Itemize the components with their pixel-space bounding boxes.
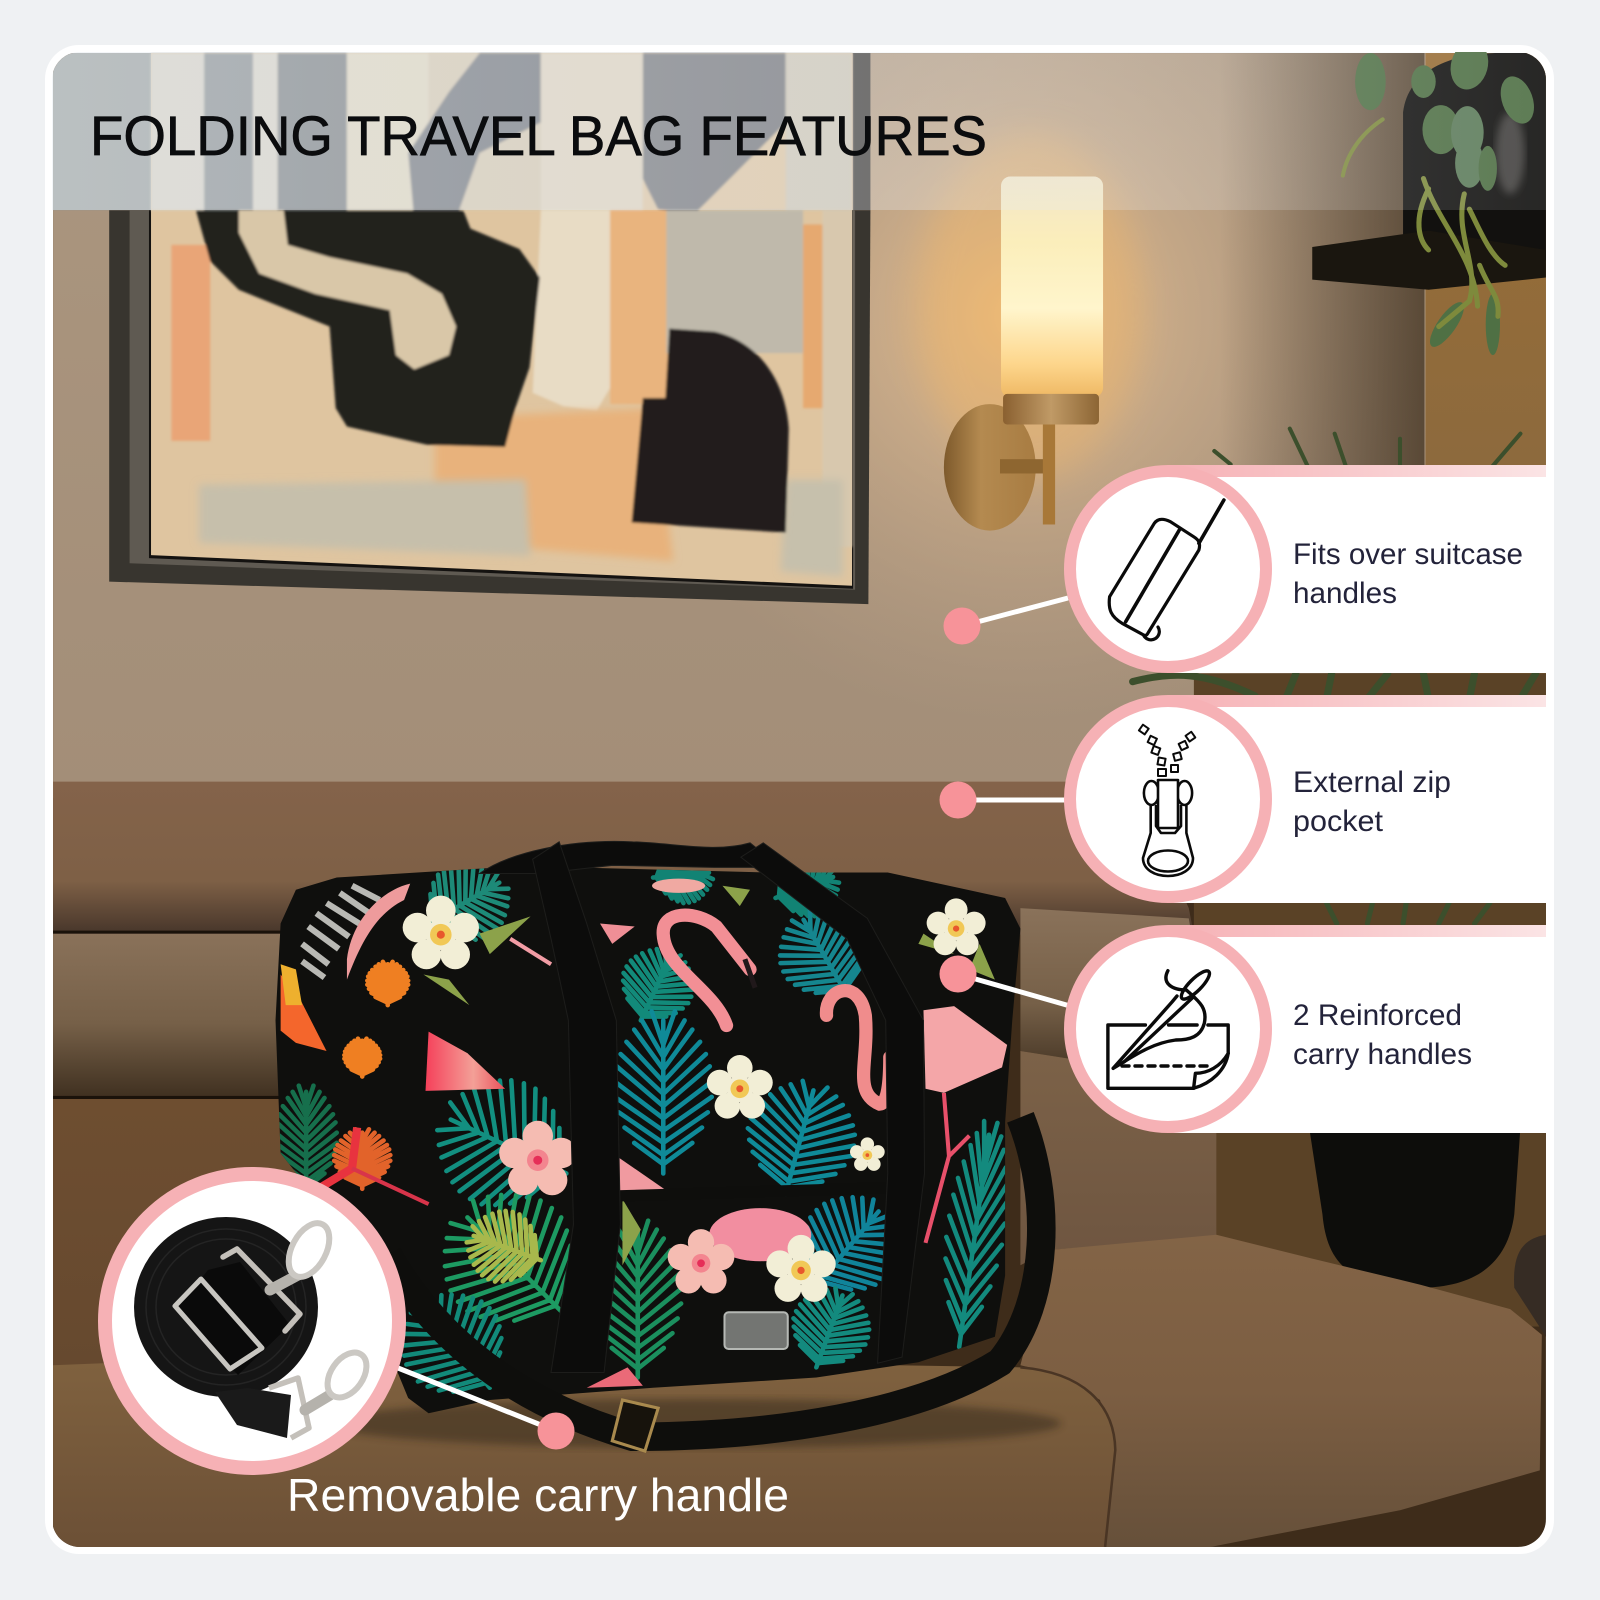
left side feather (302, 886, 380, 978)
leader line and dot 2 (940, 782, 1068, 818)
callout: external zip pocket (940, 695, 1546, 903)
olive leaves (423, 886, 995, 1265)
text: external zip pocket: External zip (1293, 766, 1451, 799)
text: external zip pocket (1293, 766, 1451, 838)
lower loop (269, 1378, 309, 1438)
bag body (276, 867, 1020, 1413)
header band (52, 52, 1546, 210)
row panel 3 (1070, 925, 1546, 1133)
coiled strap (134, 1217, 318, 1397)
text: fits over suitcase handles: Fits over suitcase (1293, 538, 1523, 571)
strap buckle (612, 1400, 658, 1451)
wall sconce (918, 133, 1143, 531)
text: removable carry handle: Removable carry handle (287, 1469, 789, 1521)
callout: reinforced carry handles (940, 925, 1546, 1133)
strap centre (176, 1262, 290, 1375)
text: external zip pocket: pocket (1293, 805, 1384, 838)
orange bird of paradise flowers (281, 974, 327, 1051)
shoulder strap (388, 1117, 1041, 1437)
metal loop (223, 1249, 300, 1331)
icon: needle and fabric (1108, 967, 1228, 1088)
text: fits over suitcase handles (1293, 538, 1523, 610)
sofa (53, 782, 1542, 1547)
floor plant fronds (1133, 429, 1536, 923)
upper clasp (270, 1216, 338, 1290)
lower flamingo (709, 1208, 811, 1261)
leader line and dot 3 (940, 956, 1070, 1006)
side table (1514, 1235, 1546, 1337)
flamingo wing (426, 1032, 505, 1091)
icon: zipper (1139, 725, 1195, 876)
middle flamingo (826, 991, 890, 1104)
leader line and dot 4 (398, 1368, 574, 1450)
text: reinforced carry handles: 2 Reinforced (1293, 999, 1462, 1032)
dark floor planter (1309, 1128, 1520, 1288)
upper flamingo (663, 915, 750, 1026)
callout: fits over suitcase handles (944, 465, 1546, 673)
duffel bag (276, 841, 1041, 1451)
title: FOLDING TRAVEL BAG FEATURES (90, 104, 987, 167)
strap tail (215, 1388, 291, 1438)
leader line and dot 1 (944, 598, 1068, 644)
icon: suitcase (1109, 500, 1224, 640)
carry handles (480, 841, 924, 1372)
seat cushion right (1020, 1235, 1542, 1547)
framed painting (53, 53, 870, 604)
text: reinforced carry handles (1293, 999, 1472, 1071)
metal slide (175, 1279, 262, 1369)
wall (53, 53, 1546, 1327)
flowers (403, 896, 479, 969)
row panel 2 (1070, 695, 1546, 903)
bag print (276, 844, 1019, 1421)
row panel 1 (1070, 465, 1546, 673)
luggage tag (724, 1312, 788, 1349)
text: reinforced carry handles: carry handles (1293, 1038, 1472, 1071)
text: fits over suitcase handles: handles (1293, 577, 1397, 610)
callout: removable carry handle (105, 1174, 789, 1521)
pocket zip (617, 1188, 886, 1196)
lower clasp (305, 1345, 374, 1410)
big flamingo body (923, 1006, 1007, 1093)
strap photo circle (105, 1174, 399, 1468)
potted plant on shelf (1312, 37, 1546, 355)
seat cushion front (53, 1355, 1115, 1547)
